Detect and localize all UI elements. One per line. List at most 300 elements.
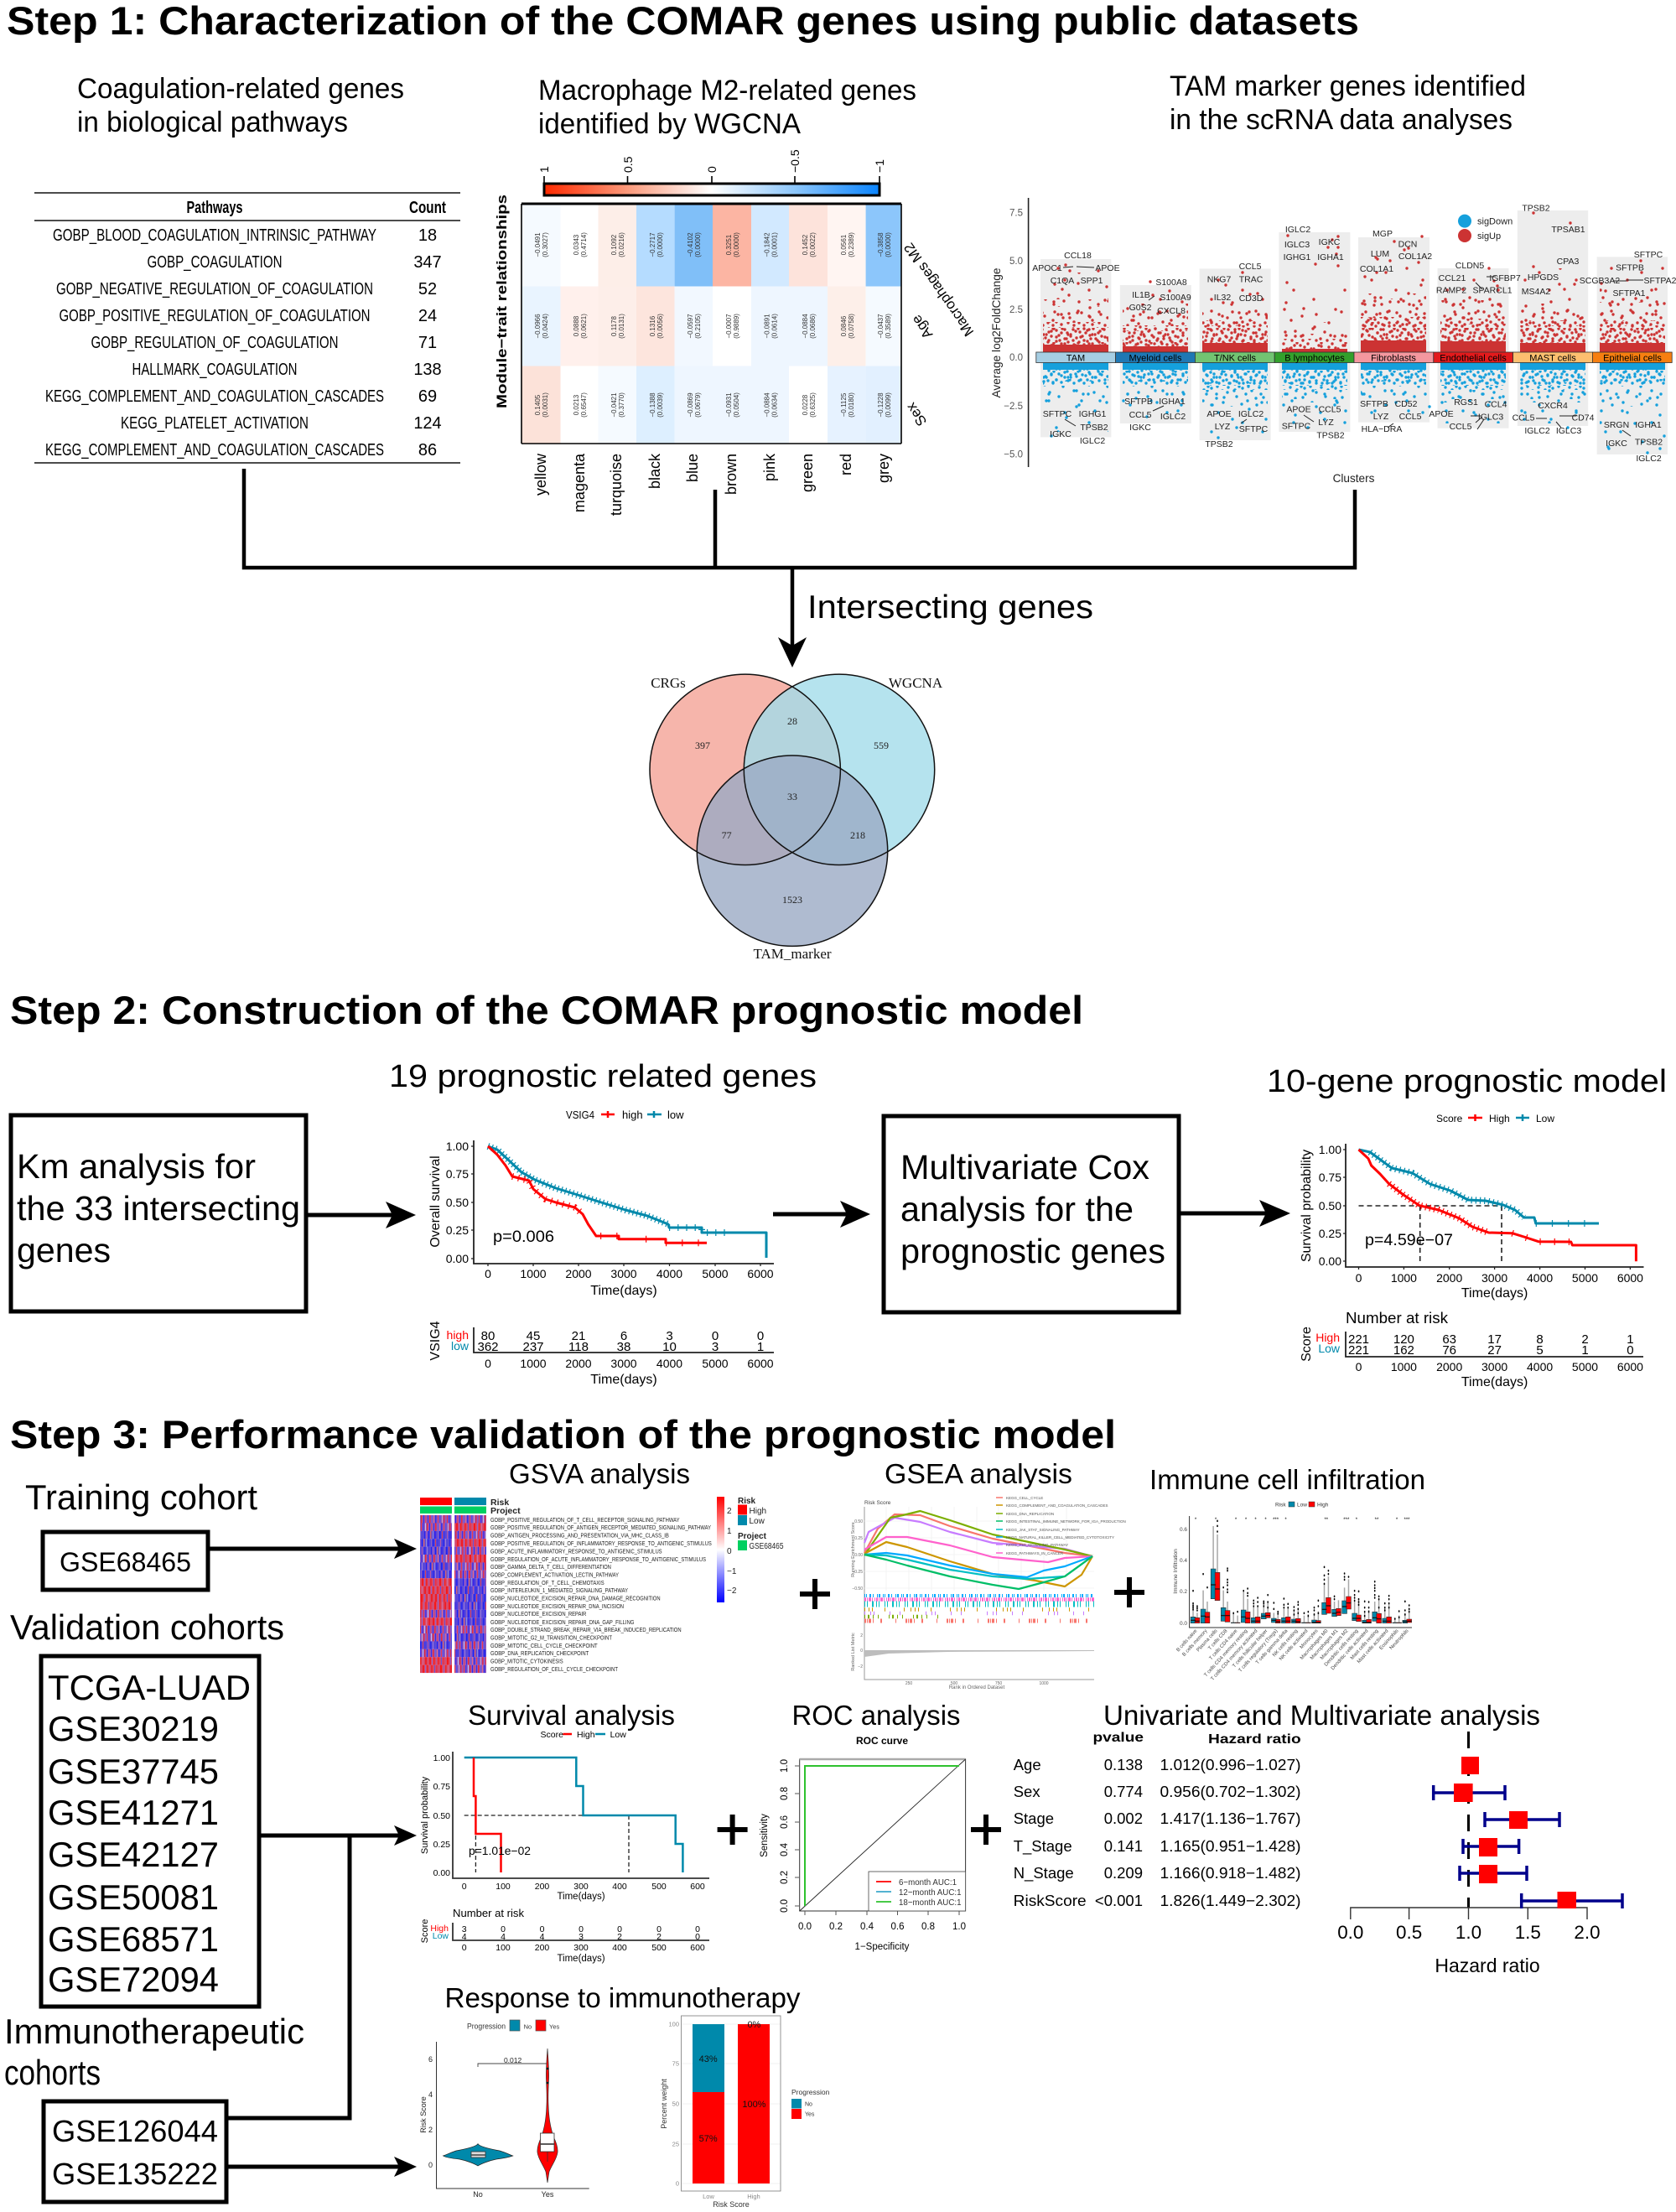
gene labels: HLA−DRA: [1362, 424, 1402, 434]
validation risk table: 4: [540, 1932, 545, 1942]
chart: immune infiltration boxplot: [1173, 1502, 1412, 1682]
immune axes: [1173, 1516, 1412, 1628]
heatmap cell values: (0.9889): [733, 314, 740, 339]
bar legend: Progression: [791, 2088, 830, 2096]
forest table: T_Stage: [1014, 1837, 1072, 1856]
GSEA legend: [996, 1496, 1126, 1555]
panel: pathways table: GOBP_POSITIVE_REGULATION_OF_COAGULATION: [59, 307, 371, 325]
cluster band: Epithelial cells: [1603, 354, 1662, 364]
GSVA gene-set labels: GOBP_ACUTE_INFLAMMATORY_RESPONSE_TO_ANTIGENIC_STIMULUS: [490, 1548, 662, 1555]
forest table: 0.141: [1104, 1837, 1143, 1855]
VSIG4 axes: Overall survival: [428, 1155, 443, 1248]
model axes: 3000: [1481, 1271, 1507, 1285]
model axes: 0.50: [1319, 1199, 1341, 1212]
gene labels: APOC1: [1032, 263, 1062, 273]
immune cell type labels: T cells regulatory (Tregs): [1238, 1628, 1279, 1674]
GSEA axes: [851, 1500, 1094, 1690]
heatmap module labels: brown: [723, 454, 739, 495]
gene labels: IL1B: [1132, 290, 1150, 300]
chart: progression stacked bar: [660, 2016, 830, 2209]
panel: pathways table: GOBP_BLOOD_COAGULATION_INTRINSIC_PATHWAY: [53, 226, 376, 245]
validation risk table: 500: [651, 1943, 667, 1953]
model risk table: 2: [1581, 1332, 1589, 1347]
model risk table: 63: [1442, 1332, 1456, 1347]
validation axes: 0.75: [433, 1782, 450, 1792]
chart: Venn diagram: 33: [787, 791, 797, 802]
model axes: 0.25: [1319, 1227, 1341, 1240]
heatmap cell values: (0.3770): [618, 392, 625, 418]
chart: Venn diagram: TAM_marker: [753, 946, 832, 962]
immune cell type labels: T cells gamma delta: [1255, 1628, 1289, 1665]
VSIG4 risk table: 3: [666, 1329, 673, 1343]
panel: pathways table: Pathways: [186, 199, 243, 217]
immune cell type labels: T cells CD8: [1207, 1628, 1229, 1651]
ROC axis labels: 1.0: [952, 1922, 966, 1932]
GSVA legend: High: [750, 1507, 766, 1516]
heatmap cell values: −0.0007: [725, 314, 733, 339]
heading: macrophage M2 genes: identified by WGCNA: [538, 108, 801, 140]
model legend: [1436, 1113, 1554, 1124]
label: intersecting genes: Intersecting genes: [807, 589, 1093, 626]
heatmap cell values: (0.0000): [733, 232, 740, 257]
gene labels: RGS1: [1454, 397, 1478, 408]
GSEA curves: [864, 1511, 1092, 1589]
box: validation cohort list: GSE72094: [48, 1960, 219, 1999]
arrow: KM box to KM plot: [308, 1202, 416, 1228]
heading: macrophage M2 genes: Macrophage M2-related genes: [538, 75, 916, 106]
heatmap trait labels: Macrophages M2: [900, 240, 977, 340]
gene labels: IGKC: [1050, 429, 1071, 439]
heatmap cell values: (0.3589): [885, 314, 892, 339]
model risk table: 17: [1487, 1332, 1502, 1347]
model axes: 0: [1356, 1271, 1362, 1285]
heatmap cell values: 0.1092: [610, 234, 618, 255]
gene labels: IGLC2: [1080, 436, 1105, 446]
panel: pathways table: 347: [413, 253, 442, 272]
gene labels: HPGDS: [1528, 273, 1559, 283]
GSEA legend: KEGG_COMPLEMENT_AND_COAGULATION_CASCADES: [1006, 1503, 1108, 1508]
heatmap module labels: blue: [684, 454, 701, 482]
heatmap cell values: (0.6325): [809, 392, 817, 418]
immune axes: *: [1356, 1518, 1358, 1523]
immune cell type labels: B cells memory: [1182, 1628, 1208, 1658]
heatmap cell values: (0.0424): [542, 314, 549, 339]
validation risk table: 2: [617, 1932, 622, 1942]
forest table: 1.826(1.449−2.302): [1160, 1892, 1301, 1909]
immune cell type labels: Dendritic cells resting: [1324, 1628, 1359, 1668]
ROC axis labels: 0.2: [829, 1922, 843, 1932]
GSEA legend: KEGG_DNA_REPLICATION: [1006, 1512, 1054, 1516]
panel: module-trait heatmap: [494, 149, 977, 516]
bar frame and grid: High: [747, 2193, 760, 2200]
box: multivariate Cox: prognostic genes: [900, 1232, 1165, 1270]
immune axes: *: [1235, 1518, 1238, 1523]
validation axes: 0.00: [433, 1868, 450, 1878]
immune legend: Risk: [1275, 1503, 1286, 1508]
gene labels: [1032, 203, 1676, 464]
model p value: p=4.59e−07: [1365, 1232, 1453, 1249]
validation legend: [540, 1730, 626, 1740]
panel: pathways table: 18: [418, 226, 437, 245]
panel: pathways table: GOBP_COAGULATION: [148, 253, 282, 272]
GSVA colour scale: 1: [727, 1527, 732, 1536]
GSVA gene-set labels: GOBP_POSITIVE_REGULATION_OF_ANTIGEN_RECEPTOR_MEDIATED_SIGNALING_PATHWAY: [490, 1524, 711, 1531]
GSVA annotation bars: [420, 1498, 521, 1516]
GSVA gene-set labels: GOBP_NUCLEOTIDE_EXCISION_REPAIR_DNA_GAP_FILLING: [490, 1618, 635, 1626]
validation axes: 100: [496, 1882, 511, 1892]
ROC legend: 6−month AUC:1: [899, 1877, 957, 1887]
ROC axis labels: 0.6: [890, 1922, 904, 1932]
VSIG4 axes: 0.00: [446, 1252, 469, 1265]
immune cell type labels: Neutrophils: [1389, 1628, 1409, 1651]
VSIG4 risk table: 118: [568, 1340, 589, 1354]
icon: plus between GSEA and immune plot: [1114, 1577, 1144, 1607]
scatter legend: [1458, 215, 1513, 242]
forest table: Hazard ratio: [1208, 1732, 1301, 1747]
heading: coagulation-related genes: Coagulation-related genes: [77, 73, 404, 105]
forest table: 0.002: [1104, 1810, 1143, 1827]
bars: [693, 2024, 770, 2183]
heatmap cell values: 0.3251: [725, 234, 733, 255]
panel: pathways table: 52: [418, 280, 437, 299]
validation risk table: [420, 1907, 709, 1964]
box: KM analysis: the 33 intersecting: [17, 1189, 300, 1228]
model risk table: 27: [1487, 1343, 1502, 1358]
GSVA legend: [738, 1497, 784, 1551]
chart: ROC curve: [760, 1735, 966, 1952]
VSIG4 risk table: 80: [481, 1329, 495, 1343]
validation axes: 0.25: [433, 1840, 450, 1850]
gene labels: CCL5: [1239, 262, 1262, 272]
heatmap colour bar: 0: [705, 166, 719, 173]
VSIG4 legend: [566, 1109, 684, 1121]
VSIG4 p value: p=0.006: [493, 1228, 554, 1246]
GSVA gene-set labels: GOBP_REGULATION_OF_CELL_CYCLE_CHECKPOINT: [490, 1665, 618, 1673]
model risk table: Low: [1318, 1342, 1341, 1355]
title: step 3: Step 3: Performance validation of the prognostic model: [10, 1412, 1116, 1456]
scatter axes: −2.5: [1004, 402, 1023, 412]
gene labels: RAMP2: [1436, 285, 1466, 295]
model axes: Time(days): [1461, 1286, 1528, 1301]
VSIG4 axes: 0.25: [446, 1223, 469, 1237]
gene labels: TPSB2: [1522, 203, 1550, 213]
GSEA axes: 0.00: [854, 1553, 863, 1558]
model axes: 1.00: [1319, 1143, 1341, 1156]
validation risk table: 4: [501, 1932, 506, 1942]
model risk table: 1: [1581, 1343, 1589, 1358]
panel: pathways table: KEGG_COMPLEMENT_AND_COAGULATION_CASCADES: [45, 387, 384, 406]
VSIG4 risk table: 6000: [747, 1357, 774, 1370]
VSIG4 risk table: 38: [617, 1340, 630, 1354]
validation risk table: 0: [579, 1924, 584, 1934]
model axes: 6000: [1617, 1271, 1643, 1285]
gene labels: CD3D: [1239, 293, 1263, 304]
gene labels: CPA3: [1557, 257, 1579, 267]
forest axis: [1337, 1732, 1601, 1976]
violin axes: 4: [428, 2090, 433, 2099]
icon: plus between survival and ROC: [718, 1815, 748, 1845]
validation legend: Score: [540, 1730, 563, 1740]
gene labels: SFTPC: [1043, 409, 1072, 419]
validation axes: 400: [612, 1882, 627, 1892]
GSVA legend: Risk: [738, 1497, 756, 1506]
immune cell type labels: Dendritic cells activated: [1331, 1628, 1369, 1671]
violin comparison bracket: [478, 2056, 547, 2067]
gene labels: IGFBP7: [1489, 273, 1521, 283]
VSIG4 risk table: 237: [522, 1340, 544, 1354]
immune cell type labels: [1175, 1628, 1409, 1682]
VSIG4 axes: 5000: [702, 1267, 729, 1280]
gene labels: TRAC: [1239, 275, 1263, 285]
heatmap cell values: −0.0966: [534, 314, 542, 339]
heatmap cell values: [534, 232, 892, 418]
heading: immunotherapeutic cohorts: Immunotherapeutic: [4, 2012, 304, 2051]
VSIG4 risk table: 3: [712, 1340, 719, 1354]
gene labels: CXCR4: [1538, 401, 1568, 411]
model risk table: 3000: [1481, 1360, 1507, 1373]
ROC axis labels: 0.4: [860, 1922, 874, 1932]
GSVA gene-set labels: GOBP_MITOTIC_CYTOKINESIS: [490, 1657, 563, 1665]
validation axes: 500: [651, 1882, 667, 1892]
gene labels: CD74: [1572, 413, 1595, 423]
chart: Venn diagram: CRGs: [651, 675, 686, 691]
VSIG4 legend: high: [622, 1109, 643, 1121]
panel: pathways table: GOBP_REGULATION_OF_COAGULATION: [91, 334, 339, 352]
heatmap cell values: −0.0597: [687, 314, 694, 339]
chart: Venn diagram: 397: [695, 740, 710, 751]
panel: pathways table: [34, 193, 460, 463]
VSIG4 axes: 3000: [610, 1267, 637, 1280]
GSEA axes: 0.50: [854, 1519, 863, 1524]
immune cell type labels: B cells naive: [1175, 1628, 1199, 1653]
red up-regulated points: [1043, 213, 1665, 352]
GSVA gene-set labels: GOBP_MITOTIC_G2_M_TRANSITION_CHECKPOINT: [490, 1633, 612, 1642]
forest table: 0.774: [1104, 1783, 1143, 1800]
VSIG4 risk table: 0: [485, 1357, 491, 1370]
GSEA axes: 0.25: [854, 1536, 863, 1541]
bar percentages: 0%: [747, 2020, 761, 2030]
gene labels: DCN: [1398, 240, 1417, 250]
heading: survival analysis: Survival analysis: [468, 1700, 675, 1731]
GSVA gene-set labels: [490, 1516, 712, 1673]
bar percentages: [699, 2020, 766, 2144]
gene labels: APOE: [1286, 404, 1311, 414]
GSVA gene-set labels: GOBP_COMPLEMENT_ACTIVATION_LECTIN_PATHWAY: [490, 1571, 619, 1578]
validation risk table: Time(days): [557, 1954, 605, 1964]
gene labels: SPP1: [1081, 276, 1103, 286]
bar frame and grid: 0: [676, 2180, 679, 2187]
immune cell type labels: NK cells activated: [1279, 1628, 1309, 1662]
forest table: 0.138: [1104, 1756, 1143, 1773]
box: validation cohort list: GSE68571: [48, 1919, 219, 1959]
ROC axis labels: [760, 1759, 966, 1952]
heatmap colour bar: −1: [873, 159, 886, 173]
immune axes: *: [1195, 1518, 1197, 1523]
validation axes: 0: [462, 1882, 467, 1892]
immune legend: High: [1317, 1503, 1329, 1508]
forest axis: Hazard ratio: [1435, 1955, 1540, 1976]
gene labels: IGHG1: [1284, 252, 1310, 262]
VSIG4 risk table: 1: [757, 1340, 764, 1354]
heatmap axis title: Module−trait relationships: [494, 195, 510, 408]
gene labels: APOE: [1206, 409, 1232, 419]
GSVA annotation bars: Project: [490, 1506, 521, 1516]
heading: univariate and multivariate analysis: Univariate and Multivariate analysis: [1103, 1700, 1540, 1731]
ROC axis labels: 0.8: [780, 1787, 790, 1800]
ROC legend: 18−month AUC:1: [899, 1898, 962, 1908]
gene labels: IGLC2: [1524, 426, 1550, 436]
cluster backgrounds: [1040, 210, 1668, 454]
forest hazard-ratio squares: [1454, 1757, 1576, 1908]
immune axes: ***: [1404, 1518, 1410, 1523]
model risk table: 5000: [1572, 1360, 1598, 1373]
box: validation cohort list: [41, 1656, 259, 2007]
GSVA gene-set labels: GOBP_NUCLEOTIDE_EXCISION_REPAIR: [490, 1610, 587, 1617]
validation axes: 0.50: [433, 1811, 450, 1821]
VSIG4 axes: 0.75: [446, 1167, 469, 1181]
forest table: N_Stage: [1014, 1864, 1074, 1882]
immune axes: ***: [1343, 1518, 1350, 1523]
immune axes: *: [1264, 1518, 1267, 1523]
gene labels: APOE: [1429, 409, 1454, 419]
heatmap colour bar: 1: [537, 166, 551, 173]
violin axes: Yes: [542, 2190, 554, 2199]
scatter axes: 0.0: [1009, 353, 1023, 363]
validation risk table: 300: [573, 1943, 589, 1953]
panel: pathways table: 24: [418, 307, 437, 325]
forest table: Age: [1014, 1756, 1041, 1773]
VSIG4 risk table: high: [447, 1328, 469, 1342]
VSIG4 axes: [428, 1140, 774, 1298]
gene labels: IGLC2: [1238, 409, 1263, 419]
VSIG4 risk table: 10: [662, 1340, 677, 1354]
validation legend: High: [577, 1730, 595, 1740]
bar legend: No: [805, 2101, 812, 2108]
validation risk table: 0: [462, 1943, 467, 1953]
violin legend: No: [524, 2022, 532, 2031]
heading: TAM marker genes: in the scRNA data analyses: [1170, 104, 1513, 136]
bar percentages: 43%: [699, 2054, 718, 2064]
validation p value: p=1.01e−02: [469, 1845, 531, 1857]
box: validation cohort list: TCGA-LUAD: [48, 1668, 251, 1707]
model risk table: High: [1315, 1331, 1340, 1344]
box: validation cohort list: GSE37745: [48, 1752, 219, 1791]
validation risk table: 600: [690, 1943, 705, 1953]
chart: Venn diagram: 218: [850, 829, 865, 841]
scatter axes: Clusters: [1333, 472, 1375, 485]
immune axes: *: [1245, 1518, 1248, 1523]
heatmap cell values: −0.2717: [649, 232, 656, 257]
gene labels: SPARCL1: [1472, 285, 1513, 295]
gene labels: SFTPB: [1360, 399, 1388, 409]
immune axes: *: [1284, 1518, 1287, 1523]
GSVA colour scale: −2: [727, 1586, 737, 1596]
forest confidence intervals: [1434, 1785, 1622, 1908]
immune axes: *: [1215, 1518, 1217, 1523]
heading: 19 prognostic related genes: 19 prognostic related genes: [389, 1059, 817, 1094]
heatmap trait labels: Age: [908, 312, 936, 342]
model risk table: 120: [1393, 1332, 1414, 1347]
model risk table: 5: [1536, 1343, 1544, 1358]
heatmap cell values: (0.0216): [618, 232, 625, 257]
GSVA gene-set labels: GOBP_DOUBLE_STRAND_BREAK_REPAIR_VIA_BREAK_INDUCED_REPLICATION: [490, 1626, 682, 1633]
gene labels: IGKC: [1606, 439, 1627, 449]
cluster band: T/NK cells: [1214, 354, 1257, 364]
gene labels: MGP: [1372, 229, 1393, 239]
heatmap cell values: −0.0884: [763, 392, 771, 418]
model risk table: [1300, 1310, 1643, 1389]
forest axis: 0.0: [1337, 1922, 1363, 1943]
GSEA rug marks: [864, 1596, 1094, 1621]
ROC axis labels: 1.0: [780, 1759, 790, 1773]
validation risk table: 4: [462, 1932, 467, 1942]
heatmap cell values: (0.0031): [542, 392, 549, 418]
VSIG4 risk table: 4000: [656, 1357, 682, 1370]
GSVA gene-set labels: GOBP_REGULATION_OF_ACUTE_INFLAMMATORY_RESPONSE_TO_ANTIGENIC_STIMULUS: [490, 1555, 706, 1563]
title: step 2: Step 2: Construction of the COMAR prognostic model: [10, 988, 1083, 1032]
model risk table: 221: [1348, 1332, 1369, 1347]
heatmap cell values: (0.2105): [694, 314, 702, 339]
GSEA axes: Rank in Ordered Dataset: [949, 1685, 1005, 1690]
model axes: Survival probability: [1300, 1150, 1314, 1262]
heatmap cell values: (0.0000): [656, 232, 664, 257]
heatmap cell values: (0.3027): [542, 232, 549, 257]
bar frame and grid: 50: [672, 2100, 679, 2108]
ROC axis labels: 0.2: [780, 1871, 790, 1884]
forest table: 0.209: [1104, 1864, 1143, 1882]
gene labels: S100A8: [1155, 278, 1187, 288]
gene labels: CCL5: [1513, 413, 1535, 423]
violin: no progression: [443, 2144, 513, 2166]
VSIG4 risk table: Time(days): [590, 1373, 657, 1387]
ROC axis labels: 0.0: [798, 1922, 812, 1932]
ROC axis labels: Sensitivity: [760, 1814, 770, 1857]
model risk table: 221: [1348, 1343, 1369, 1358]
VSIG4 risk table: 45: [527, 1329, 540, 1343]
arrow: immunotherapy cohorts to response plots: [226, 2157, 417, 2177]
heatmap cell values: (0.0131): [618, 314, 625, 339]
validation axes: 600: [690, 1882, 705, 1892]
box: multivariate Cox: [884, 1116, 1179, 1312]
panel: pathways table: KEGG_COMPLEMENT_AND_COAGULATION_CASCADES: [45, 441, 384, 460]
panel: pathways table: 124: [413, 414, 442, 433]
VSIG4 risk table: 5000: [702, 1357, 729, 1370]
model risk table: Time(days): [1461, 1375, 1528, 1389]
gene labels: IGHA1: [1317, 252, 1344, 262]
model axes: 5000: [1572, 1271, 1598, 1285]
gene labels: SFTPA2: [1644, 276, 1676, 286]
immune cell type labels: Macrophages M0: [1300, 1628, 1330, 1661]
heatmap cell values: −0.0884: [802, 314, 809, 339]
heading: response to immunotherapy: Response to immunotherapy: [444, 1982, 801, 2013]
cluster band: B lymphocytes: [1284, 354, 1345, 364]
VSIG4 risk table: [428, 1321, 774, 1387]
forest table: [1014, 1731, 1301, 1909]
bar frame and grid: 75: [672, 2059, 679, 2068]
gene labels: CCL5: [1129, 410, 1152, 420]
cluster band: Fibroblasts: [1371, 354, 1416, 364]
heatmap cell values: −0.0869: [687, 392, 694, 418]
VSIG4 risk table: VSIG4: [428, 1321, 443, 1361]
icon: plus between ROC and forest plot: [971, 1815, 1001, 1845]
model axes: [1300, 1143, 1643, 1301]
GSEA axes: −2: [858, 1664, 863, 1669]
gene labels: IGLC2: [1285, 225, 1310, 235]
gene labels: SFTPC: [1282, 421, 1311, 431]
heading: GSEA analysis: GSEA analysis: [885, 1458, 1072, 1489]
GSVA annotation bars: Risk: [490, 1498, 509, 1508]
GSEA axes: Running Enrichment Score: [851, 1522, 856, 1577]
